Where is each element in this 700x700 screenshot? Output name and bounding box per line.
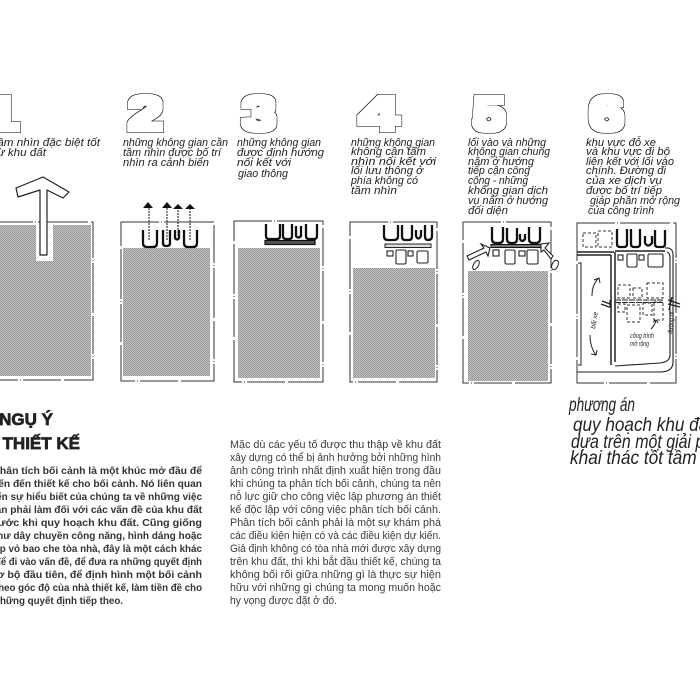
text block: left column — [0, 465, 203, 607]
caption step 3: giao thông — [238, 168, 289, 180]
service road label: đường đi — [667, 311, 676, 334]
service rooms 6 — [618, 254, 663, 267]
heading — [0, 410, 80, 453]
step 6 numeral: 6 — [589, 88, 624, 140]
text block: right column: hy vọng được đặt ở đó. — [230, 595, 337, 607]
caption step 2 — [123, 137, 228, 169]
icon: entry arrows — [601, 297, 680, 310]
text block: left column: để đi vào vấn đề, để đưa ra những quyết định — [0, 556, 202, 568]
text block: right column: hữu với những gì chúng ta mong muốn hoặc — [230, 582, 442, 594]
caption step 6: của xe dịch vụ — [586, 175, 662, 187]
hatched site area 3 — [238, 248, 320, 378]
heading: NGỤ Ý — [0, 410, 54, 429]
step 5 numeral: 5 — [473, 88, 505, 140]
icon: view arrows up — [143, 202, 195, 240]
caption step 4: phía không có — [350, 175, 418, 187]
caption step 2: những không gian cần — [123, 137, 228, 149]
caption step 5: không gian chung — [468, 146, 551, 158]
panel: site diagram 6 master plan — [577, 223, 680, 383]
caption step 6: chính. Đường đi — [586, 165, 667, 177]
expansion label — [630, 331, 654, 348]
caption step 2: nhìn ra cảnh biển — [123, 157, 209, 169]
caption step 3: được định hướng — [237, 147, 325, 159]
icon: leaf markers — [471, 259, 560, 271]
caption step 4: tầm nhìn — [351, 185, 397, 197]
future dashed units — [583, 231, 612, 247]
panel: site diagram 4 — [350, 222, 437, 382]
caption step 5: lối vào và những — [468, 137, 547, 149]
heading: THIẾT KẾ — [3, 434, 80, 453]
access road 3 — [265, 240, 315, 244]
service rooms 5 — [493, 250, 538, 264]
access road 5 — [491, 244, 541, 248]
unit cluster 4 — [384, 225, 432, 240]
caption step 5: tiếp cận công — [468, 165, 531, 177]
expansion dashed rooms — [618, 283, 663, 322]
panel: site diagram 1 — [0, 177, 93, 380]
caption step 1 — [0, 137, 101, 159]
panel: site diagram 3 — [234, 221, 323, 382]
panel: site diagram 2 — [121, 202, 214, 381]
caption step 6: được bố trí tiếp — [586, 185, 662, 197]
caption step 4 — [350, 137, 437, 197]
road network — [577, 248, 673, 372]
icon: view arrow — [16, 177, 69, 255]
step 3 numeral: 3 — [242, 88, 276, 140]
caption step 6: của công trình — [588, 205, 654, 217]
text block: left column: theo góc độ của nhà thiết kế, làm tiền đề cho — [0, 582, 202, 594]
caption step 5: vụ nằm ở hướng — [468, 194, 549, 207]
caption step 5 — [468, 137, 551, 217]
caption step 4: lối lưu thông ở — [351, 165, 424, 177]
caption step 6: và khu vực đi bộ — [586, 146, 670, 158]
text block: right column — [230, 439, 442, 607]
service rooms 4 — [387, 250, 428, 264]
text block: right column: trên khu đất, thì khi bắt đầu thiết kế, chúng ta — [230, 555, 441, 568]
unit cluster 5 — [492, 227, 540, 243]
caption step 5: nằm ở hướng — [468, 155, 535, 168]
text block: right column: kế độc lập với công việc phân tích bối cảnh. — [230, 504, 441, 516]
caption step 6: liên kết với lối vào — [586, 156, 674, 168]
step 2 numeral: 2 — [128, 88, 163, 140]
handwritten conclusion note — [568, 395, 700, 469]
expansion label: mở rộng — [630, 339, 650, 348]
icon: curved arrows — [590, 278, 658, 355]
hatched site area 4 — [353, 268, 435, 378]
caption step 5: đối diện — [468, 205, 508, 217]
text block: right column: ảnh công trình nhất định xuất hiện trong đầu — [230, 465, 441, 477]
icon: entry arrow left — [467, 244, 490, 260]
handwritten conclusion note: phương án — [568, 395, 635, 416]
icon: service arrow right — [541, 243, 553, 259]
unit cluster 6 — [617, 229, 665, 247]
text block: right column: khi chúng ta phân tích bối cảnh, chúng ta nên — [230, 478, 441, 490]
panel: site diagram 5 — [463, 222, 560, 383]
caption step 3: những không gian — [237, 137, 321, 149]
caption step 4: những không gian — [351, 137, 435, 149]
parking label: bãi xe — [590, 311, 600, 329]
caption step 5: không gian dịch — [468, 185, 548, 197]
text block: right column: không bối rối giữa những gì là thực sự hiện — [230, 569, 441, 581]
unit cluster 2 — [143, 230, 197, 247]
hatched site area 2 — [123, 248, 210, 376]
caption step 2: tầm nhìn được bố trí — [123, 147, 222, 159]
caption step 4: nhìn nối kết với — [351, 156, 437, 168]
caption step 6 — [586, 136, 681, 217]
access road 4 — [385, 244, 431, 248]
text block: right column: Phân tích bối cảnh phải là một sự khám phá — [230, 517, 441, 529]
step 4 numeral: 4 — [359, 88, 400, 140]
text block: right column: xây dựng có thể bị ảnh hưởng bởi những hình — [230, 452, 441, 464]
text block: right column: nỗ lực giữ cho công việc lập phương án thiết — [230, 490, 441, 503]
text block: right column: Giả định không có tòa nhà mới được xây dựng — [230, 543, 441, 555]
expansion label: công trình — [630, 331, 654, 340]
hatched site area 5 — [468, 271, 548, 381]
caption step 3 — [237, 137, 325, 180]
caption step 6: khu vực đỗ xe — [586, 136, 656, 149]
caption step 4: không cần tầm — [351, 146, 426, 158]
hatched site area 1 — [0, 225, 91, 376]
caption step 6: giáp phần mở rộng — [590, 195, 681, 207]
unit cluster 3 — [266, 224, 317, 239]
caption step 5: cộng - những — [468, 175, 529, 187]
text block: right column: Mặc dù các yếu tố được thu thập về khu đất — [230, 439, 441, 451]
text block: right column: các điều kiện hiện có và các điều kiện dự kiến. — [230, 530, 441, 542]
caption step 3: nối kết với — [237, 157, 292, 169]
